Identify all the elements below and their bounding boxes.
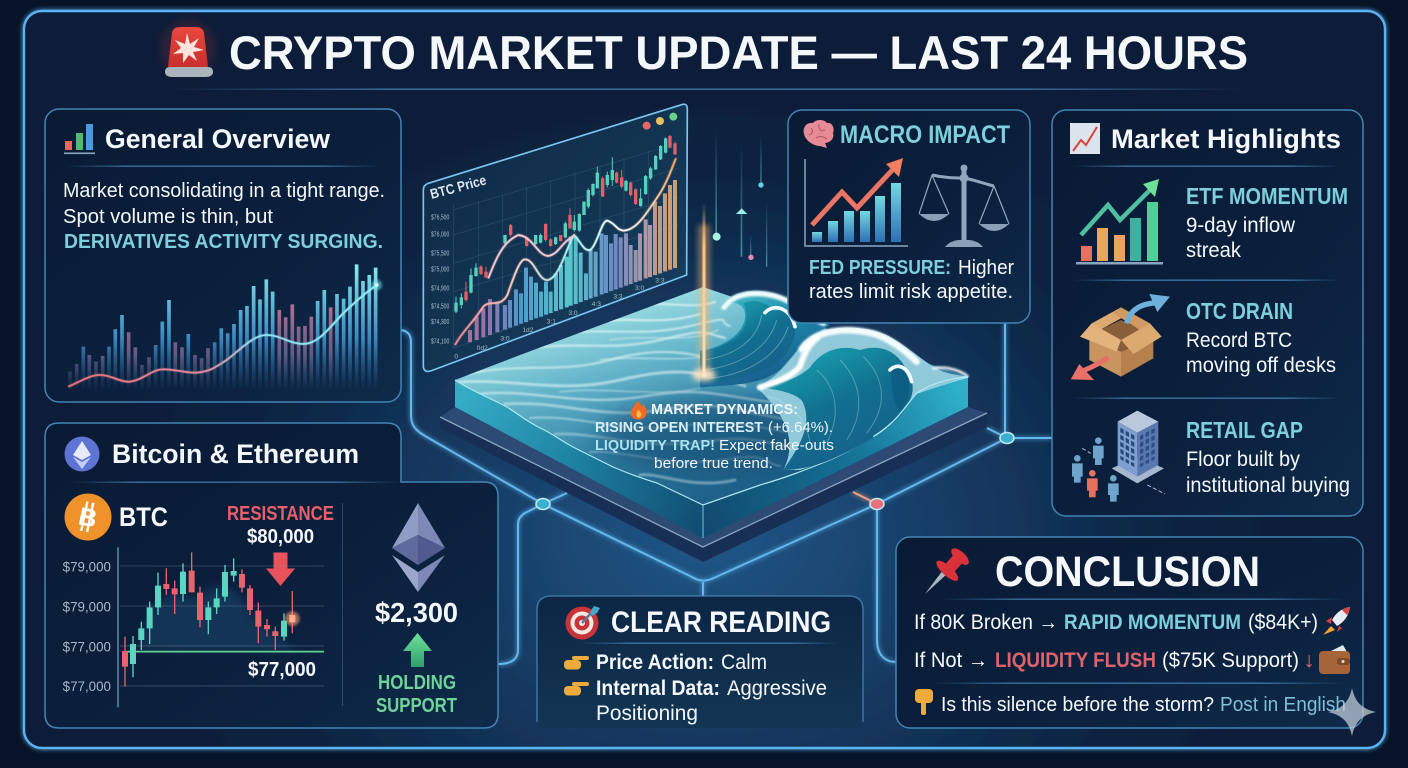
resistance label bbox=[227, 503, 334, 548]
resistance label: RESISTANCE bbox=[227, 503, 334, 525]
icon: target bbox=[566, 606, 600, 640]
callout: market dynamics bbox=[595, 401, 834, 472]
icon: chart paper bbox=[1070, 123, 1100, 154]
time axis labels: 3:1 bbox=[547, 318, 556, 325]
water front faces bbox=[455, 377, 968, 538]
item: ETF momentum bbox=[1076, 179, 1348, 264]
icon: ethereum diamond bbox=[392, 503, 445, 592]
scenario: breakout: RAPID MOMENTUM bbox=[1064, 611, 1241, 634]
green candles bbox=[456, 137, 666, 313]
panel: conclusion bbox=[896, 537, 1363, 728]
time axis labels: 3:0 bbox=[500, 336, 510, 343]
chart grid bbox=[453, 143, 678, 348]
BTC support label: $77,000 bbox=[248, 659, 316, 681]
time axis labels: 3:0 bbox=[635, 285, 645, 292]
heading: CONCLUSION bbox=[995, 548, 1260, 596]
callout: market dynamics: Expect fake-outs bbox=[719, 437, 834, 454]
water ripples bbox=[460, 302, 810, 483]
callout: market dynamics: before true trend. bbox=[654, 455, 773, 472]
macro text bbox=[809, 257, 1014, 303]
price axis labels: $74,100 bbox=[431, 336, 449, 345]
icon: flame bbox=[631, 401, 647, 420]
water surface bbox=[455, 287, 968, 505]
connector lines bbox=[401, 323, 1052, 664]
item: OTC drain: moving off desks bbox=[1186, 354, 1336, 377]
panel: macro impact bbox=[788, 110, 1030, 323]
time axis labels: 0d2 bbox=[477, 345, 488, 352]
latest candle bbox=[290, 591, 294, 633]
water front edge highlight bbox=[455, 377, 968, 505]
axis labels: $79,000 bbox=[63, 599, 111, 615]
heading: General Overview bbox=[105, 124, 331, 154]
icon: down arrow bbox=[266, 552, 295, 586]
time axis labels: 3:3 bbox=[613, 293, 623, 300]
icon: sparkle bbox=[1328, 688, 1376, 736]
item: retail gap: Floor built by bbox=[1186, 448, 1300, 471]
title bbox=[160, 20, 1248, 79]
icon: rising bars bbox=[1076, 179, 1163, 264]
macro text: Higher bbox=[958, 257, 1014, 279]
icon: up arrow bbox=[403, 633, 432, 667]
reading list: Internal Data: bbox=[596, 677, 720, 700]
ETH price: $2,300 bbox=[375, 597, 458, 628]
breaking waves bbox=[700, 291, 968, 470]
scenario: flush: LIQUIDITY FLUSH bbox=[995, 649, 1156, 672]
reading list: Positioning bbox=[596, 702, 698, 725]
panel: clear reading bbox=[537, 596, 863, 728]
panel: general overview bbox=[45, 109, 401, 402]
time axis labels: 4:3 bbox=[592, 301, 601, 308]
scenario: flush: ↓ bbox=[1303, 649, 1315, 672]
price axis labels: $74,900 bbox=[431, 284, 449, 293]
chart title: BTC Price bbox=[428, 172, 488, 202]
overview text: Spot volume is thin, but bbox=[63, 206, 273, 228]
icon: bar chart bbox=[64, 124, 95, 154]
chart: derivatives activity bbox=[68, 264, 382, 388]
time axis labels: 0 bbox=[454, 353, 458, 360]
callout: market dynamics: (+6.64%). bbox=[768, 419, 833, 436]
price axis labels: $76,000 bbox=[431, 230, 449, 239]
callout: market dynamics: MARKET DYNAMICS: bbox=[651, 401, 798, 418]
holding support label: SUPPORT bbox=[376, 695, 457, 717]
resistance label: $80,000 bbox=[247, 526, 314, 548]
item: ETF momentum: 9-day inflow bbox=[1186, 214, 1296, 237]
time axis labels: 3:0 bbox=[568, 310, 578, 317]
red candles bbox=[125, 552, 275, 687]
overview text: DERIVATIVES ACTIVITY SURGING. bbox=[64, 231, 383, 253]
icon: box with arrows bbox=[1071, 294, 1170, 380]
callout: market dynamics: LIQUIDITY TRAP! bbox=[595, 437, 715, 454]
volume bars bbox=[470, 180, 675, 342]
item: retail gap: RETAIL GAP bbox=[1186, 417, 1303, 443]
icon: pointing hand bbox=[564, 682, 589, 696]
axis labels: $77,000 bbox=[63, 678, 111, 694]
price axis labels: $75,000 bbox=[431, 265, 449, 274]
icon: pointing hand bbox=[564, 656, 589, 670]
heading: Bitcoin & Ethereum bbox=[112, 439, 359, 469]
heading: CLEAR READING bbox=[611, 606, 831, 639]
icon: push pin bbox=[925, 544, 974, 594]
heading: MACRO IMPACT bbox=[840, 121, 1010, 149]
call to action: Is this silence before the storm? bbox=[941, 694, 1214, 716]
holding support label bbox=[376, 672, 457, 717]
heading: Market Highlights bbox=[1111, 124, 1341, 154]
chart screen bbox=[423, 104, 687, 371]
time axis labels: 3:3 bbox=[655, 277, 665, 284]
icon: bitcoin coin: B bbox=[76, 502, 100, 534]
chart icon: rising rates bbox=[805, 158, 908, 246]
reading list: Price Action: bbox=[596, 651, 714, 674]
icon: pointing down hand bbox=[915, 689, 933, 715]
overview text: Market consolidating in a tight range. bbox=[63, 180, 385, 202]
scenario: flush: If Not → bbox=[914, 649, 988, 672]
central water platform bbox=[440, 287, 987, 562]
reading list: Aggressive bbox=[727, 677, 827, 700]
item: OTC drain: OTC DRAIN bbox=[1186, 298, 1293, 324]
BTC label: BTC bbox=[119, 502, 168, 532]
item: OTC drain bbox=[1071, 294, 1336, 380]
first wave bbox=[700, 291, 830, 387]
callout: market dynamics: RISING OPEN INTEREST bbox=[595, 419, 763, 436]
item: ETF momentum: ETF MOMENTUM bbox=[1186, 183, 1348, 209]
price axis labels: $74,500 bbox=[431, 301, 449, 310]
light beam and rising markers bbox=[692, 127, 767, 381]
trend lines bbox=[455, 158, 676, 345]
window dots bbox=[643, 113, 677, 130]
panel: market highlights bbox=[1052, 110, 1363, 516]
macro text: FED PRESSURE: bbox=[809, 257, 951, 279]
shaded water behind callout bbox=[597, 400, 833, 476]
red candles bbox=[466, 135, 675, 302]
icon: wallet bbox=[1319, 645, 1350, 674]
price axis labels: $75,500 bbox=[431, 248, 449, 257]
scenario: flush: ($75K Support) bbox=[1162, 649, 1299, 672]
scenario: breakout: ($84K+) bbox=[1248, 611, 1318, 634]
holding support label: HOLDING bbox=[378, 672, 456, 694]
second wave bbox=[757, 328, 968, 470]
price axis labels: $74,300 bbox=[431, 317, 449, 326]
icon: alarm light bbox=[160, 20, 216, 77]
reading list: Calm bbox=[721, 651, 767, 674]
icon: rocket bbox=[1323, 607, 1350, 635]
call to action bbox=[941, 694, 1346, 716]
price axis labels: $76,500 bbox=[431, 212, 449, 221]
icon: building and people bbox=[1072, 411, 1165, 502]
item: OTC drain: Record BTC bbox=[1186, 329, 1292, 352]
icon: ethereum coin bbox=[64, 436, 100, 472]
item: ETF momentum: streak bbox=[1186, 239, 1241, 262]
icon: brain bbox=[804, 120, 834, 148]
call to action: Post in English bbox=[1220, 694, 1346, 716]
axis labels bbox=[63, 559, 111, 694]
overview text bbox=[63, 180, 385, 253]
green candles bbox=[133, 558, 284, 677]
connector nodes bbox=[536, 432, 1014, 510]
price axis labels bbox=[431, 212, 449, 345]
reading list bbox=[564, 651, 827, 725]
scenario: flush bbox=[914, 649, 1315, 672]
scenario: breakout bbox=[914, 611, 1318, 634]
item: retail gap bbox=[1072, 411, 1350, 502]
macro text: rates limit risk appetite. bbox=[809, 281, 1013, 303]
time axis labels: 1d2 bbox=[522, 327, 534, 334]
time axis labels bbox=[454, 277, 665, 360]
item: retail gap: institutional buying bbox=[1186, 474, 1350, 497]
chart: BTC price screen bbox=[423, 104, 687, 371]
panel: bitcoin and ethereum bbox=[45, 423, 498, 728]
platform slab bbox=[440, 407, 987, 562]
icon: bitcoin coin bbox=[64, 494, 112, 540]
axis labels: $79,000 bbox=[63, 559, 111, 575]
chart: BTC candlesticks bbox=[63, 547, 324, 707]
axis labels: $77,000 bbox=[63, 639, 111, 655]
icon: scales bbox=[919, 164, 1009, 247]
heading text: CRYPTO MARKET UPDATE — LAST 24 HOURS bbox=[229, 26, 1248, 79]
scenario: breakout: If 80K Broken → bbox=[914, 611, 1058, 634]
